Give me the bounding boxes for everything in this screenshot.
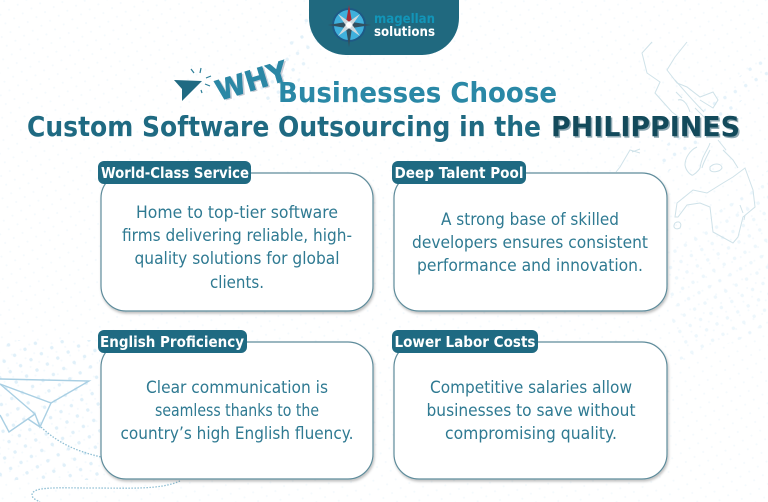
logo text [374,12,435,40]
body text: seamless thanks to the [155,401,319,421]
heading: WHY: WHY [213,55,294,109]
heading: Philippines: PHILIPPINES [552,112,742,144]
body text: businesses to save without [426,401,636,421]
body text: developers ensures consistent [412,233,648,253]
body text: quality solutions for global [134,249,340,269]
panel: World-Class Service [98,161,373,311]
tab label: Lower Labor Costs [394,333,536,351]
body text: country’s high English fluency. [120,424,354,444]
logo text: solutions [374,25,435,40]
body text [426,378,636,444]
heading: Philippines: PHILIPPINES [551,110,740,143]
body text: Home to top-tier software [136,203,338,223]
tab label: English Proficiency [100,333,244,351]
body text: A strong base of skilled [441,210,619,230]
philippines map outline [616,42,755,243]
icon: paper plane with sparks [174,68,211,101]
body text: compromising quality. [445,424,617,444]
tab label: World-Class Service [101,164,249,182]
body text: Clear communication is [146,378,328,398]
body text [412,210,648,276]
heading line 2: Custom Software Outsourcing in the [27,110,541,143]
body text: firms delivering reliable, high- [122,226,352,246]
body text [120,378,354,444]
body text: clients. [210,273,264,293]
panel: English Proficiency [98,330,373,479]
panel: Lower Labor Costs [392,330,667,479]
dotted flight path [32,427,180,502]
logo pill [309,0,459,55]
logo text: magellan [374,12,435,27]
panel: Deep Talent Pool [392,161,667,311]
body text: performance and innovation. [417,256,643,276]
body text [122,203,352,293]
icon: folded paper plane [0,379,89,432]
tab label: Deep Talent Pool [394,164,524,182]
heading line 1: Businesses Choose [278,76,557,109]
heading: WHY: WHY [211,54,293,108]
body text: Competitive salaries allow [430,378,632,398]
icon: compass [328,5,371,47]
